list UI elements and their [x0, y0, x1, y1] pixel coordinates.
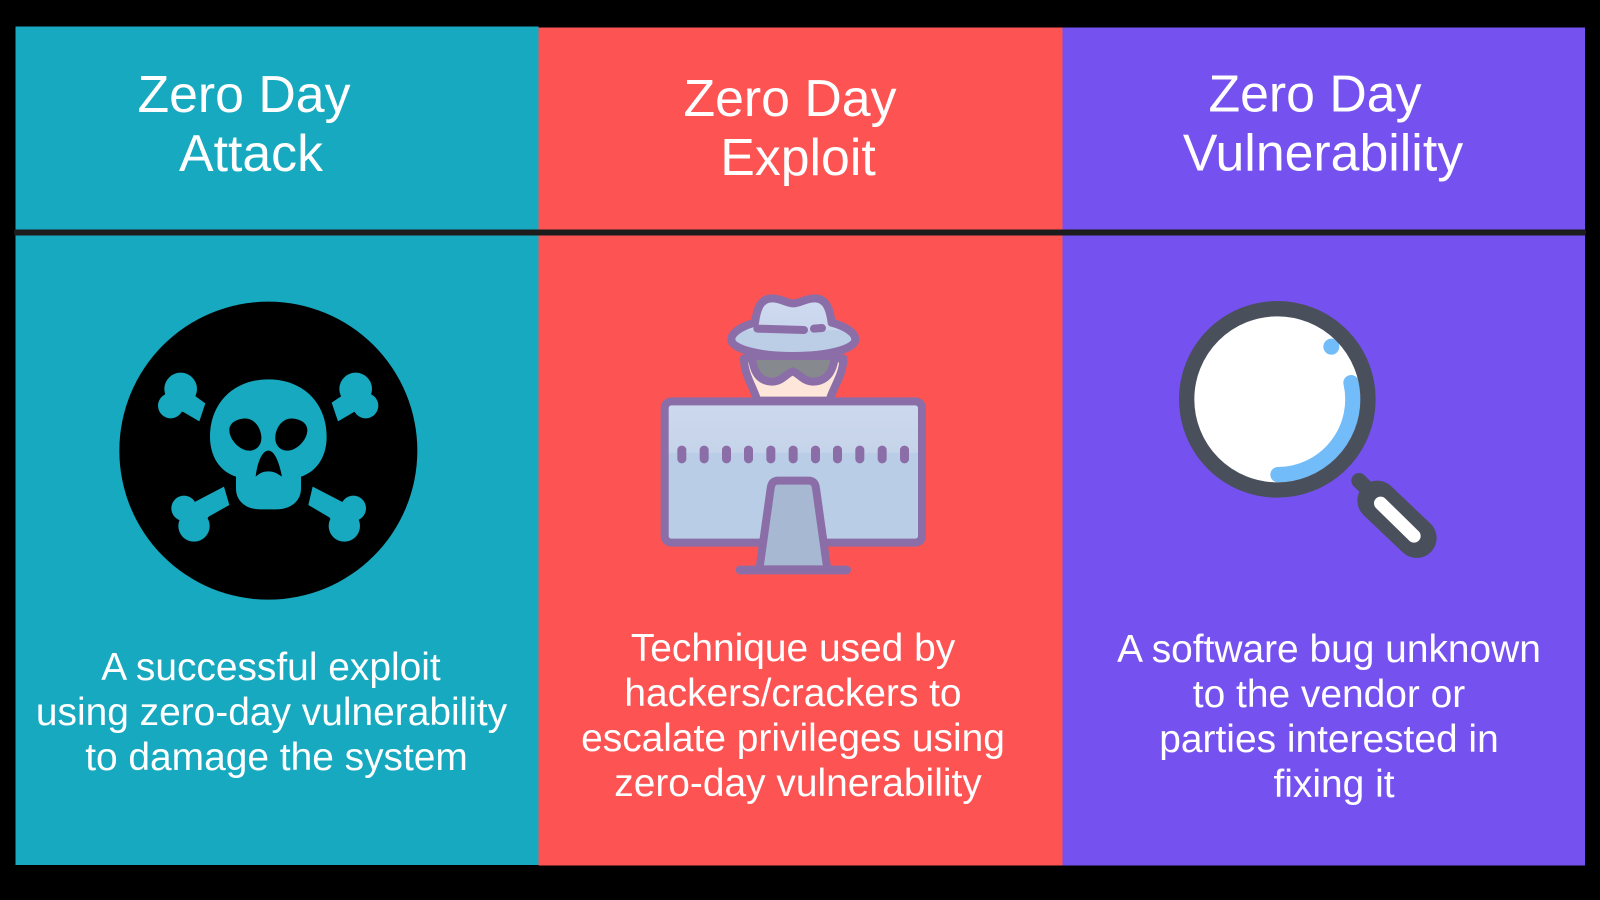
panel: zero day exploit: [538, 28, 1062, 866]
description: attack: [36, 646, 508, 779]
description: exploit: zero-day vulnerability: [614, 762, 982, 805]
face: [744, 358, 843, 401]
glasses: [752, 356, 835, 382]
heading: zero day vulnerability: [1183, 64, 1463, 182]
icon: skull and crossbones: [119, 302, 417, 600]
heading: zero day attack: Attack: [179, 124, 323, 182]
heading: zero day exploit: [683, 69, 897, 186]
monitor: [665, 401, 922, 543]
heading: zero day vulnerability: Vulnerability: [1183, 124, 1463, 182]
heading: zero day vulnerability: Zero Day: [1208, 64, 1422, 122]
description: vulnerability: to the vendor or: [1193, 673, 1465, 716]
hat: [731, 298, 855, 356]
description: vulnerability: fixing it: [1273, 763, 1395, 806]
description: vulnerability: [1117, 628, 1541, 806]
heading: zero day exploit: Exploit: [720, 128, 876, 186]
description: exploit: [581, 627, 1005, 805]
divider line: [14, 230, 1586, 236]
icon: magnifying glass: [1187, 309, 1417, 538]
description: attack: using zero-day vulnerability: [36, 691, 508, 734]
description: exploit: Technique used by: [631, 627, 956, 670]
description: exploit: hackers/crackers to: [624, 672, 962, 715]
description: attack: A successful exploit: [101, 646, 441, 689]
description: attack: to damage the system: [85, 736, 468, 779]
description: vulnerability: parties interested in: [1159, 718, 1499, 761]
description: exploit: escalate privileges using: [581, 717, 1005, 760]
heading: zero day attack: Zero Day: [137, 65, 351, 123]
icon: hacker behind monitor: [665, 298, 922, 570]
heading: zero day attack: [137, 65, 351, 182]
panel: zero day vulnerability: [1062, 28, 1585, 866]
description: vulnerability: A software bug unknown: [1117, 628, 1541, 671]
panel: zero day attack: [16, 26, 538, 865]
heading: zero day exploit: Zero Day: [683, 69, 897, 127]
